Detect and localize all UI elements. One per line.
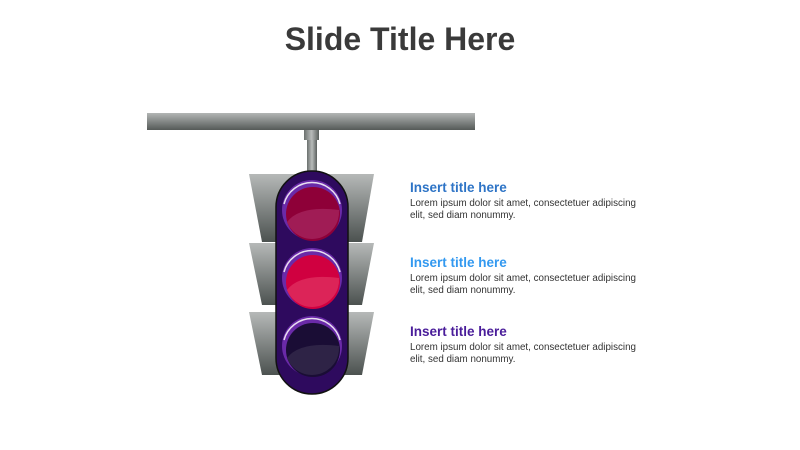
horizontal bar [147,113,475,130]
light: pink middle [282,248,342,309]
text item 1: Insert title here [410,180,507,195]
light: dark bottom [282,316,342,377]
light: red top [282,180,342,241]
text item 2 [410,255,636,296]
text item 3 [410,324,636,364]
text item 2: Lorem ipsum dolor sit amet, consectetuer adipiscing elit, sed diam nonummy. [410,273,636,296]
housing [276,171,348,394]
text item 1 [410,180,636,220]
title: Slide Title Here [285,21,515,57]
pole [304,130,319,174]
text item 3: Insert title here [410,324,507,339]
text item 2: Insert title here [410,255,507,270]
visors [249,174,374,375]
text item 1: Lorem ipsum dolor sit amet, consectetuer adipiscing elit, sed diam nonummy. [410,198,636,220]
text item 3: Lorem ipsum dolor sit amet, consectetuer adipiscing elit, sed diam nonummy. [410,342,636,364]
